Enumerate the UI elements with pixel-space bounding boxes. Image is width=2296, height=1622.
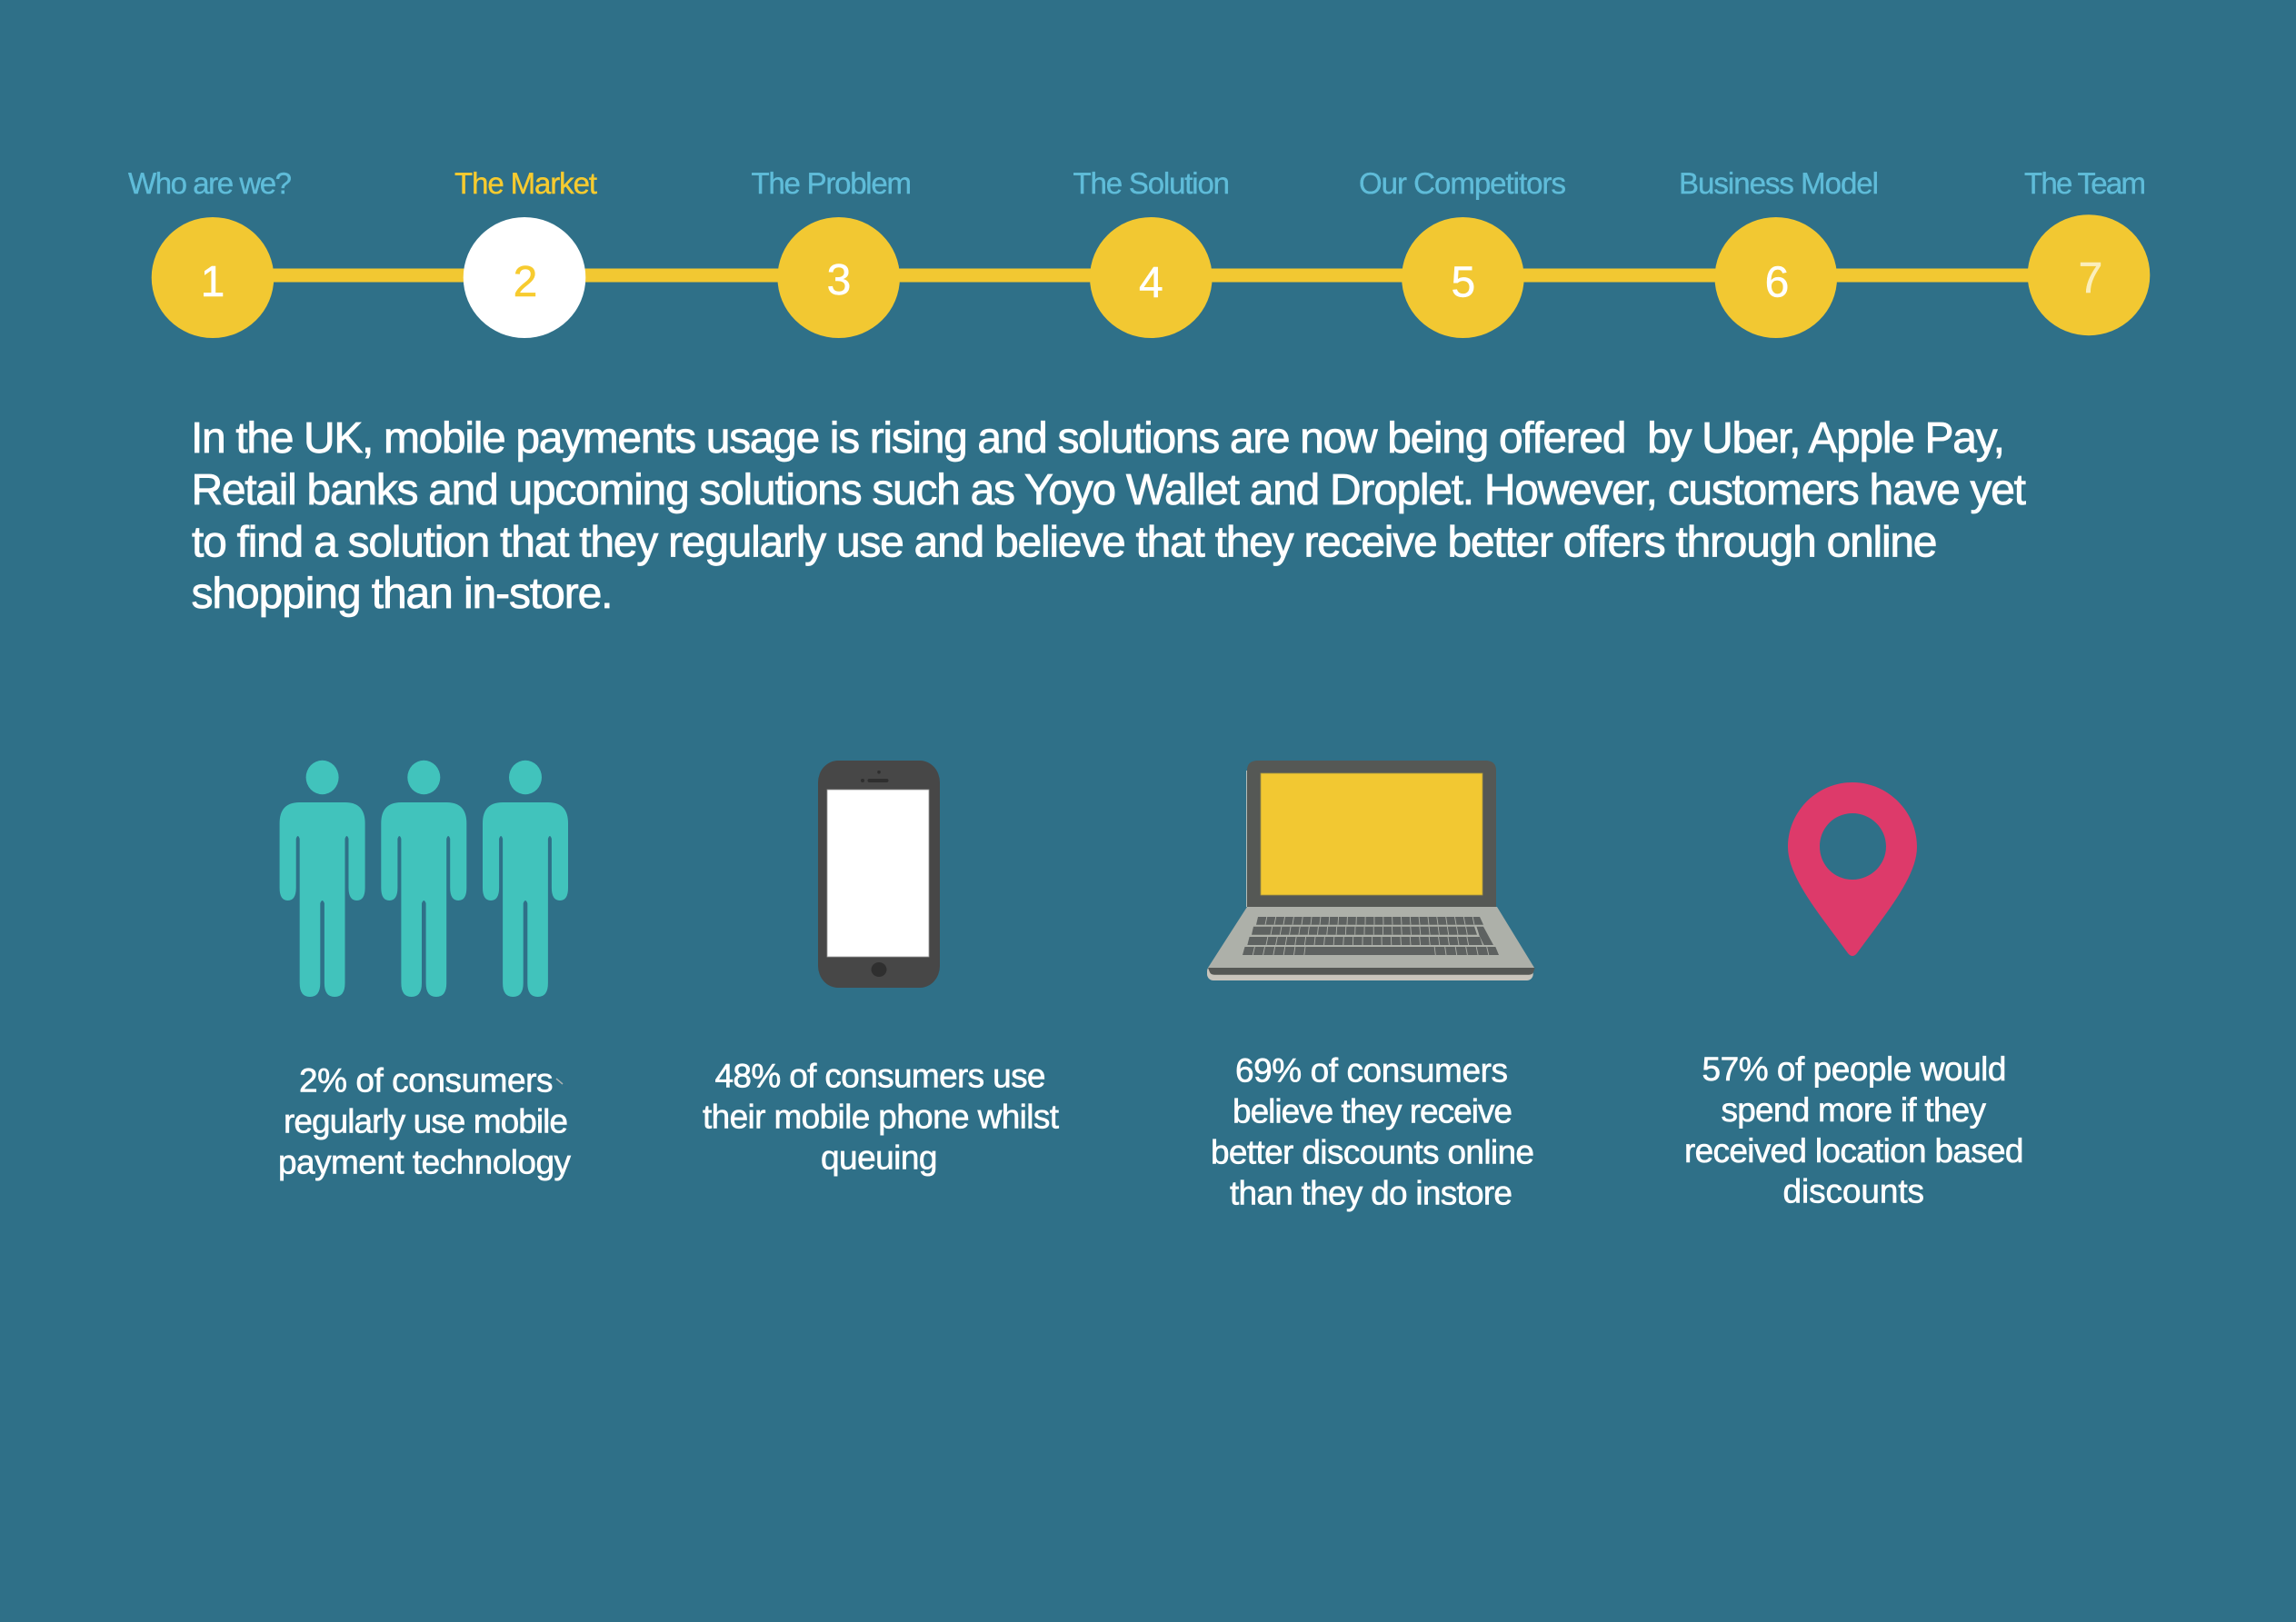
icon: smartphone (818, 761, 940, 988)
step 1: Who are we?: Who are we? (128, 166, 292, 200)
icon: laptop (1207, 761, 1534, 980)
step 3: The Problem (751, 166, 912, 338)
step 2: The Market (active): The Market (454, 166, 597, 200)
step 3: The Problem: 3 (827, 256, 851, 304)
step 1: Who are we? (128, 166, 292, 338)
intro paragraph (191, 414, 2026, 618)
step 4: The Solution (1073, 166, 1230, 338)
step 6: Business Model: Business Model (1679, 166, 1879, 200)
step 2: The Market (active) (454, 166, 597, 338)
intro paragraph: shopping than in-store. (191, 570, 613, 618)
laptop keyboard (1243, 917, 1499, 955)
navigation timeline (128, 166, 2150, 338)
caption: 57% of people (1684, 1050, 2023, 1210)
caption: 57% of people: 57% of people would (1702, 1050, 2007, 1088)
intro paragraph: In the UK, mobile payments usage is rising and solutions are now being offered by Uber, Apple Pay, (191, 414, 2005, 463)
laptop base (1208, 907, 1534, 968)
caption: 2% of consumers: payment technology (278, 1144, 571, 1181)
step 2: The Market (active): 2 (514, 258, 537, 306)
caption: 69% of consumers: 69% of consumers (1235, 1052, 1508, 1090)
step 4: The Solution: 4 (1139, 259, 1163, 307)
step 7: The Team: 7 (2079, 254, 2102, 303)
step 7: The Team (2024, 166, 2150, 335)
icon: location pin (1788, 782, 1917, 956)
caption: 69% of consumers: believe they receive (1233, 1093, 1512, 1130)
caption: 48% of consumers (703, 1058, 1060, 1177)
laptop lid (1247, 761, 1496, 907)
person 2 (381, 761, 466, 997)
laptop stand shadow (1207, 965, 1533, 980)
intro paragraph: to find a solution that they regularly use and believe that they receive better offers through online (192, 518, 1938, 567)
person 3 (483, 761, 568, 997)
caption: 69% of consumers (1211, 1052, 1534, 1212)
caption: 69% of consumers: than they do instore (1230, 1175, 1512, 1212)
step 5: Our Competitors: Our Competitors (1359, 166, 1566, 200)
caption: 57% of people: spend more if they (1722, 1091, 1987, 1129)
step 5: Our Competitors: 5 (1452, 258, 1475, 307)
step 4: The Solution: The Solution (1073, 166, 1230, 200)
caption: 2% of consumers: regularly use mobile (284, 1103, 568, 1140)
step 6: Business Model: 6 (1765, 258, 1789, 307)
caption: 48% of consumers: 48% of consumers use (714, 1058, 1045, 1095)
intro paragraph: Retail banks and upcoming solutions such as Yoyo Wallet and Droplet. However, customers have yet (191, 466, 2026, 514)
timeline connector bar (213, 269, 2089, 282)
step 7: The Team: The Team (2024, 166, 2146, 200)
caption: 69% of consumers: better discounts online (1211, 1134, 1534, 1171)
laptop screen (1261, 773, 1482, 895)
step 3: The Problem: The Problem (751, 166, 912, 200)
caption: 2% of consumers (278, 1062, 571, 1181)
step 1: Who are we?: 1 (201, 258, 225, 306)
caption: 2% of consumers: 2% of consumers (299, 1062, 553, 1100)
caption: 57% of people: discounts (1783, 1172, 1924, 1210)
caption: 48% of consumers: queuing (821, 1139, 938, 1177)
caption: 48% of consumers: their mobile phone whilst (703, 1099, 1060, 1136)
icon: three people (280, 761, 568, 997)
person 1 (280, 761, 365, 997)
caption: 57% of people: received location based (1684, 1132, 2023, 1169)
step 5: Our Competitors (1359, 166, 1566, 338)
step 6: Business Model (1679, 166, 1879, 338)
